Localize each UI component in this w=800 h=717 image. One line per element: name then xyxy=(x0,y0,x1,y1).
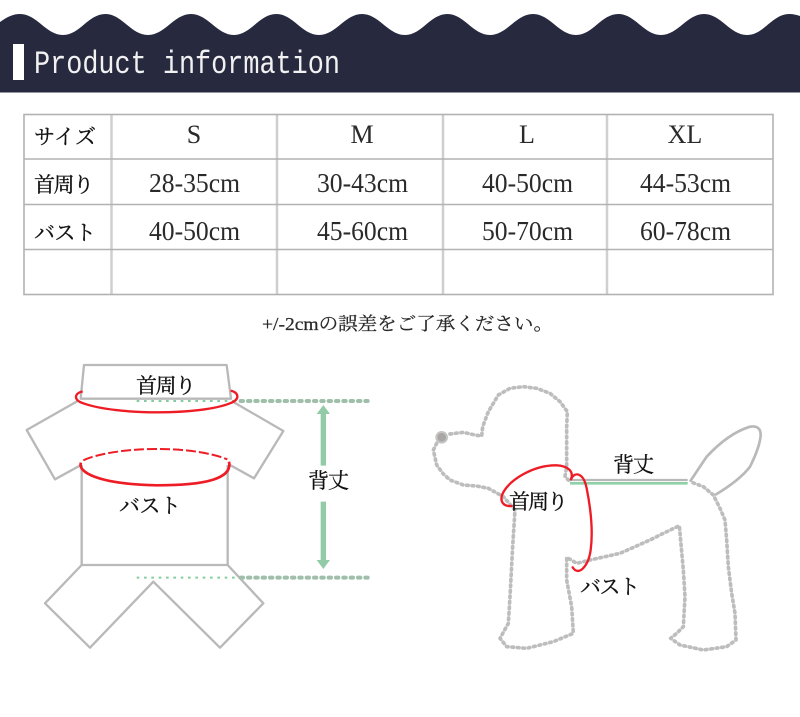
dog tail xyxy=(690,426,761,495)
neck measurement ring xyxy=(76,391,237,412)
table row: neck: 30-43cm xyxy=(317,168,408,198)
tolerance note: +/-2cmの誤差をご了承ください。 xyxy=(262,314,553,334)
header accent bar xyxy=(13,44,24,80)
dog diagram: 首周り xyxy=(509,490,568,514)
garment diagram: 背丈 xyxy=(308,469,349,493)
header banner with scalloped top xyxy=(0,14,800,92)
table row: neck: 40-50cm xyxy=(482,168,573,198)
garment diagram xyxy=(27,365,372,648)
dog diagram: バスト xyxy=(580,575,640,599)
table row: bust: バスト xyxy=(34,221,96,245)
back length line xyxy=(570,480,688,483)
table row: neck: 44-53cm xyxy=(640,168,731,198)
table row: bust: 50-70cm xyxy=(482,216,573,246)
table row: bust xyxy=(34,216,731,246)
table row: bust: 40-50cm xyxy=(149,216,240,246)
table row: neck: 28-35cm xyxy=(149,168,240,198)
garment outline xyxy=(27,365,283,648)
table header row: XL xyxy=(668,120,702,149)
dog nose xyxy=(436,432,447,443)
bust measurement curve xyxy=(571,474,592,571)
back length arrows xyxy=(317,405,330,569)
dog labels: 背丈 xyxy=(613,453,654,477)
table row: bust: 45-60cm xyxy=(317,216,408,246)
header title: Product information xyxy=(34,46,340,83)
table header row: S xyxy=(187,120,201,149)
green guide lines xyxy=(137,401,372,578)
neck measurement curve xyxy=(501,465,572,506)
dog outline xyxy=(433,387,736,650)
table header row: L xyxy=(519,120,535,149)
size table xyxy=(24,114,773,295)
table row: neck xyxy=(34,168,731,198)
bust measurement ring xyxy=(81,449,229,485)
garment labels: 首周り xyxy=(136,374,196,398)
table row: neck: 首周り xyxy=(34,173,94,197)
dog diagram xyxy=(433,387,761,650)
table header row: M xyxy=(350,120,374,149)
table header row: サイズ xyxy=(34,125,96,149)
garment diagram: バスト xyxy=(119,494,181,518)
table header row xyxy=(34,120,702,149)
table row: bust: 60-78cm xyxy=(640,216,731,246)
